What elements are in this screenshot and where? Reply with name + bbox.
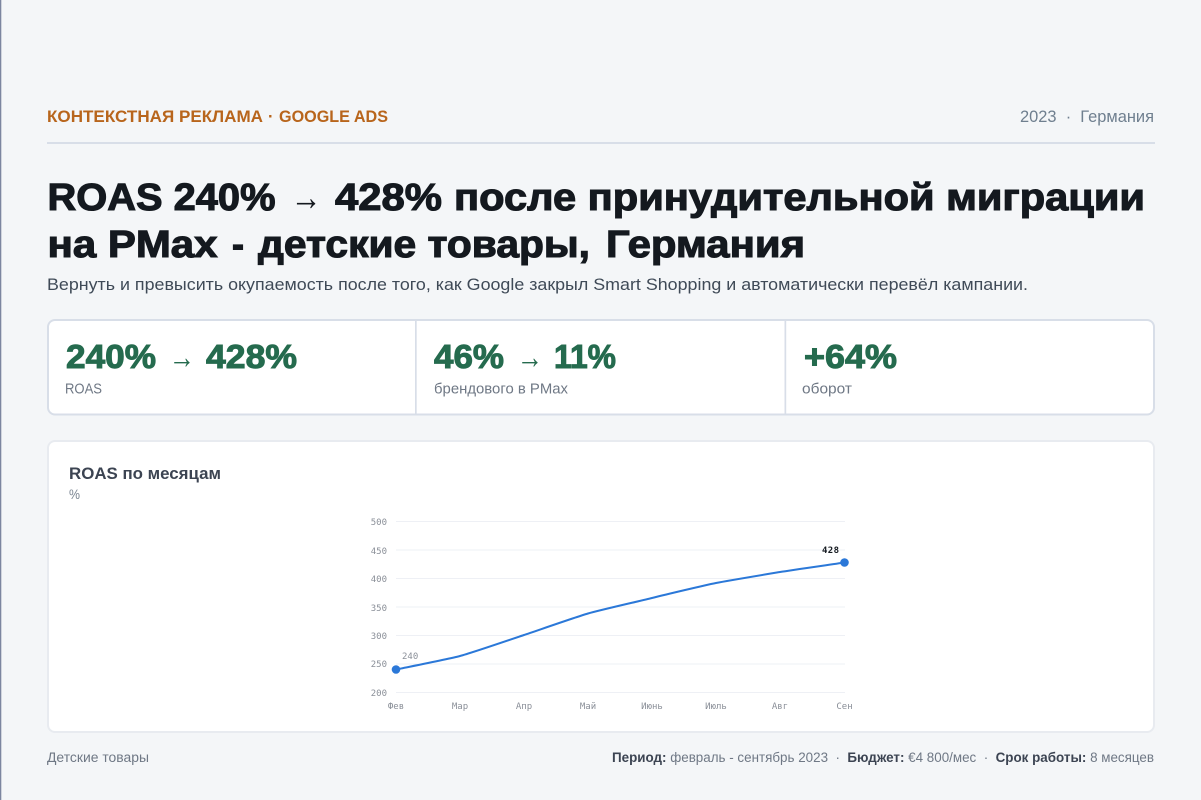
KPI: branded share: 46% (434, 338, 504, 375)
y axis labels: 250 (371, 660, 387, 670)
x axis labels: Июнь (641, 702, 663, 712)
KPI: turnover (802, 338, 897, 398)
end point (840, 558, 849, 567)
start value label: 240 (402, 652, 418, 662)
KPI: branded share (434, 338, 616, 398)
header eyebrow: КОНТЕКСТНАЯ РЕКЛАМА (47, 108, 263, 126)
KPI: ROAS: ROAS (65, 382, 102, 398)
KPI: branded share: брендового в PMax (434, 382, 569, 398)
title: 428% (335, 177, 442, 219)
KPI: ROAS: 428% (206, 338, 297, 375)
start point (392, 665, 400, 674)
chart title: ROAS по месяцам (69, 465, 221, 483)
y axis labels: 400 (371, 575, 387, 585)
header year and country: 2023 · Германия (1020, 108, 1154, 126)
x axis labels: Июль (705, 702, 727, 712)
KPI: turnover: +64% (804, 338, 897, 375)
subtitle: Вернуть и превысить окупаемость после того, как Google закрыл Smart Shopping и автоматически перевёл кампании. (47, 275, 1028, 294)
KPI: ROAS: → (169, 338, 195, 375)
panel: KPI cards (48, 320, 1154, 414)
title: → (290, 177, 322, 219)
KPI: branded share: → (517, 338, 543, 375)
KPI: ROAS (65, 338, 297, 398)
title: Германия (606, 224, 805, 266)
data line (396, 562, 844, 670)
chart unit: % (69, 486, 80, 502)
y axis labels: 500 (371, 518, 387, 528)
footer details: Период: февраль - сентябрь 2023 · Бюджет: €4 800/мес · Срок работы: 8 месяцев (612, 750, 1154, 765)
header eyebrow: · (268, 108, 274, 126)
title: после принудительной миграции (454, 177, 1145, 219)
x axis labels: Апр (516, 702, 532, 712)
end value label: 428 (822, 546, 839, 556)
x axis labels: Сен (836, 702, 853, 712)
header eyebrow: GOOGLE ADS (279, 108, 388, 126)
KPI: ROAS: 240% (66, 338, 156, 375)
x axis labels (388, 702, 853, 712)
KPI: turnover: оборот (802, 382, 852, 398)
y axis labels: 300 (371, 632, 387, 642)
x axis labels: Авг (772, 702, 788, 712)
y axis labels (371, 518, 387, 699)
KPI: branded share: 11% (554, 338, 616, 375)
x axis labels: Мар (452, 702, 468, 712)
panel: chart (48, 441, 1154, 732)
y axis labels: 350 (371, 604, 387, 614)
y axis labels: 450 (371, 547, 387, 557)
x axis labels: Фев (388, 702, 404, 712)
line chart (371, 518, 853, 712)
title (48, 177, 1145, 266)
title: - (232, 224, 244, 266)
title: на PMax (48, 224, 218, 266)
x axis labels: Май (580, 702, 596, 712)
y axis labels: 200 (371, 689, 387, 699)
title: ROAS 240% (48, 177, 276, 219)
header eyebrow (47, 108, 388, 126)
title: детские товары, (258, 224, 590, 266)
footer category: Детские товары (47, 750, 149, 765)
